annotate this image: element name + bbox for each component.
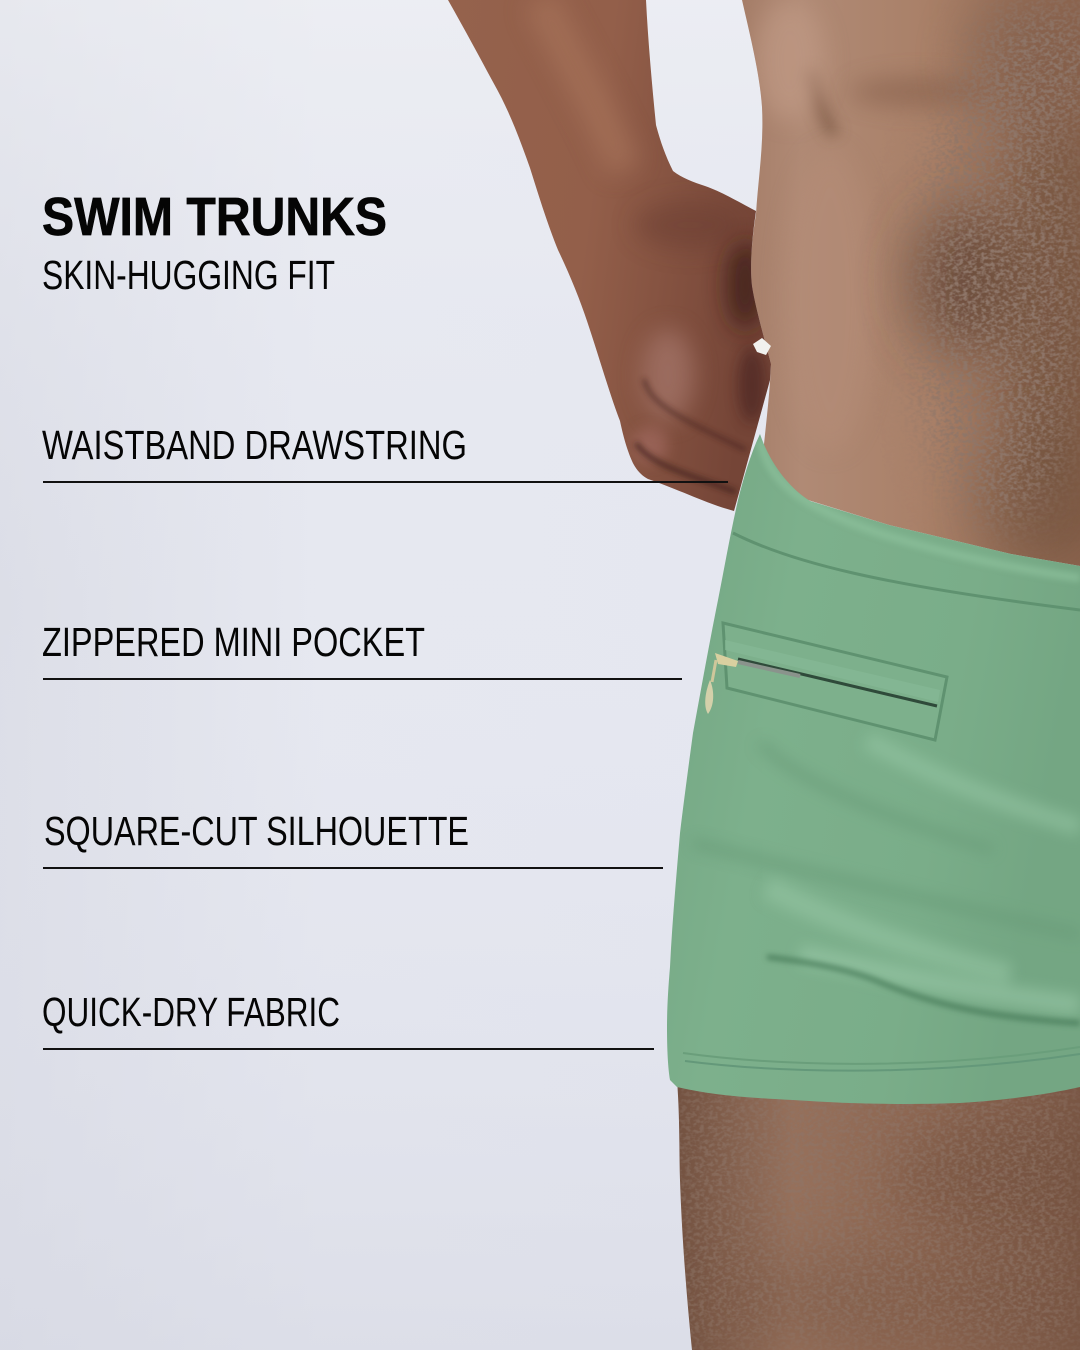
zippered pocket	[705, 623, 947, 740]
hand shadow	[727, 240, 763, 330]
feature: zippered mini pocket: ZIPPERED MINI POCKET	[42, 619, 425, 665]
title: SWIM TRUNKS	[42, 187, 387, 247]
waistband stitching	[733, 533, 1080, 610]
photo: green swim trunks	[660, 430, 1080, 1110]
photo: drawstring	[753, 338, 771, 355]
body hair texture	[915, 70, 1080, 530]
fabric folds	[693, 740, 1080, 1023]
finger creases	[644, 379, 746, 450]
photo: model's arm and hand	[440, 0, 780, 520]
feature: square-cut silhouette: SQUARE-CUT SILHOUETTE	[44, 808, 469, 854]
feature: waistband drawstring: WAISTBAND DRAWSTRING	[42, 422, 467, 468]
highlights	[755, 6, 824, 114]
subtitle: SKIN-HUGGING FIT	[42, 252, 335, 298]
body hair shading	[913, 205, 1017, 355]
waistband lip highlight	[760, 440, 1080, 578]
photo: model's torso	[740, 0, 1080, 580]
rib crease	[808, 70, 835, 135]
hem stitching	[683, 1047, 1080, 1064]
feature: quick-dry fabric: QUICK-DRY FABRIC	[42, 989, 340, 1035]
knuckle tint	[642, 329, 694, 421]
photo: model's leg	[670, 1080, 1080, 1350]
forearm highlight	[540, 0, 625, 170]
